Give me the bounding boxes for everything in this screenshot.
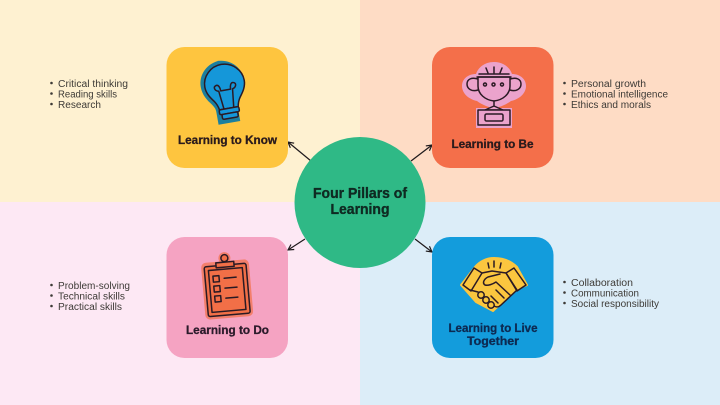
central circle — [294, 137, 426, 268]
icon: light bulb — [197, 57, 251, 127]
list: Learning to Be skills: Ethics and morals — [571, 100, 651, 111]
card: Learning to Do — [166, 237, 288, 358]
list: Learning to Live Together skills: Communication — [571, 288, 639, 300]
list: Learning to Do skills — [50, 281, 130, 313]
arrow: to Learning to Know — [288, 142, 311, 161]
list: Learning to Do skills: Practical skills — [58, 302, 122, 313]
list: Learning to Know skills — [50, 79, 128, 111]
list: Learning to Live Together skills: Social responsibility — [571, 299, 659, 310]
list: Learning to Be skills: Personal growth — [571, 79, 646, 90]
list: Learning to Be skills — [563, 79, 668, 111]
card: Learning to Be — [432, 47, 554, 168]
arrow: to Learning to Be — [411, 145, 432, 161]
list: Learning to Know skills: Reading skills — [58, 90, 117, 100]
card: Learning to Know — [166, 47, 288, 168]
list: Learning to Be skills: Emotional intelligence — [571, 90, 668, 100]
list: Learning to Live Together skills — [563, 278, 659, 310]
arrow: to Learning to Live Together — [415, 239, 432, 252]
arrow: to Learning to Do — [288, 239, 305, 250]
icon: handshake — [461, 258, 527, 311]
list: Learning to Do skills: Technical skills — [58, 292, 125, 302]
card title: Learning to Be — [452, 139, 534, 151]
card title: Together — [467, 336, 520, 348]
list: Learning to Know skills: Research — [58, 100, 101, 111]
panel: Learning to Do background — [0, 202, 360, 405]
icon: trophy — [462, 62, 526, 128]
list: Learning to Do skills: Problem-solving — [58, 281, 130, 292]
central title: Four Pillars of — [313, 186, 407, 202]
list: Learning to Know skills: Critical thinking — [58, 79, 128, 90]
list: Learning to Live Together skills: Collaboration — [571, 278, 633, 289]
panel: Learning to Know background — [0, 0, 360, 202]
card: Learning to Live Together — [432, 237, 554, 358]
central title: Learning — [330, 202, 390, 218]
card title: Learning to Do — [186, 325, 269, 337]
panel: Learning to Be background — [360, 0, 720, 202]
panel: Learning to Live Together background — [360, 202, 720, 405]
card title: Learning to Know — [178, 135, 277, 147]
card title: Learning to Live — [448, 323, 538, 335]
icon: clipboard — [200, 250, 254, 320]
